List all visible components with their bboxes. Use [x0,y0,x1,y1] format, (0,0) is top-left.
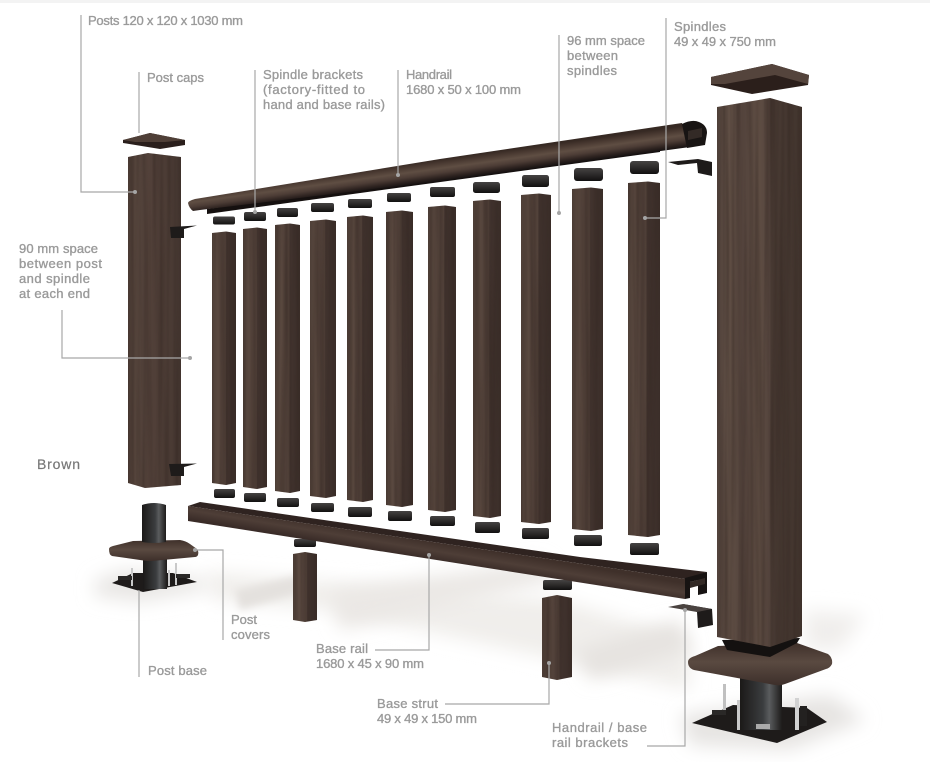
callout: spindle brackets [253,67,385,214]
left post cap [123,133,185,149]
base plate [692,705,827,743]
left upper bracket [170,226,197,238]
callout: space between post and spindle: between post [19,256,102,271]
right post [717,98,802,647]
callout: base rail [316,553,431,671]
left post [128,153,181,488]
base rail [188,502,707,599]
spindles [212,182,660,537]
callout: base strut: 49 x 49 x 150 mm [377,711,477,726]
callout: handrail and base rail brackets: rail brackets [552,735,628,750]
callout: space between spindles [557,33,645,215]
upper tube [142,503,166,543]
callout: post caps: Post caps [147,70,204,85]
callout: base strut: Base strut [377,696,438,711]
post cover [688,643,832,685]
lower tube [740,678,782,730]
callout: post base: Post base [148,663,207,678]
callout: post covers: Post [231,612,257,627]
callout: base rail: Base rail [316,641,368,656]
callout: spindles: 49 x 49 x 750 mm [674,34,776,49]
callout: spindles [643,18,776,220]
right upper bracket [668,159,712,176]
callout: space between post and spindle: and spindle [19,271,90,286]
callout: base rail: 1680 x 45 x 90 mm [316,656,424,671]
base plate [112,573,197,592]
right post base [688,638,832,743]
base rail end [685,572,707,599]
callout: space between post and spindle: at each end [19,286,90,301]
callout: spindle brackets: hand and base rails) [263,97,385,112]
callout: space between spindles: 96 mm space [567,33,645,48]
callout: post base [139,590,207,678]
right lower bracket [668,604,713,628]
left base strut [293,552,317,622]
left base strut bracket [294,539,316,547]
label: brown colour: Brown [37,456,80,472]
post cover [109,540,198,561]
lower tube [143,556,167,589]
right base strut bracket [543,580,572,590]
bolts [712,684,807,730]
callout: spindle brackets: (factory-fitted to [263,82,365,97]
callout: base strut [377,661,551,726]
callout: space between spindles: between [567,48,618,63]
callout: posts: Posts 120 x 120 x 1030 mm [88,13,243,28]
callout: handrail and base rail brackets: Handrail / base [552,720,647,735]
handrail [188,121,707,214]
callout: space between post and spindle [19,241,192,360]
left lower bracket [169,464,197,476]
right base strut [542,595,572,680]
right post cap [711,64,809,94]
callout: post covers: covers [231,627,270,642]
callout: handrail and base rail brackets [552,608,687,750]
callout: space between spindles: spindles [567,63,618,78]
callout: space between post and spindle: 90 mm space [19,241,98,256]
callout: post caps [139,70,204,133]
callout: post covers [193,548,270,642]
handrail end [682,121,707,148]
callout: handrail: Handrail [406,67,452,82]
left post base [109,503,198,592]
callout: handrail [396,67,521,177]
callout: posts [81,13,243,194]
bolts [118,563,190,586]
callout: spindle brackets: Spindle brackets [263,67,364,82]
collar [722,638,800,657]
bottom spindle brackets [214,489,659,555]
top spindle brackets [213,161,659,224]
ground shadows [95,560,865,750]
callout: spindles: Spindles [674,19,726,34]
callout: handrail: 1680 x 50 x 100 mm [406,82,521,97]
